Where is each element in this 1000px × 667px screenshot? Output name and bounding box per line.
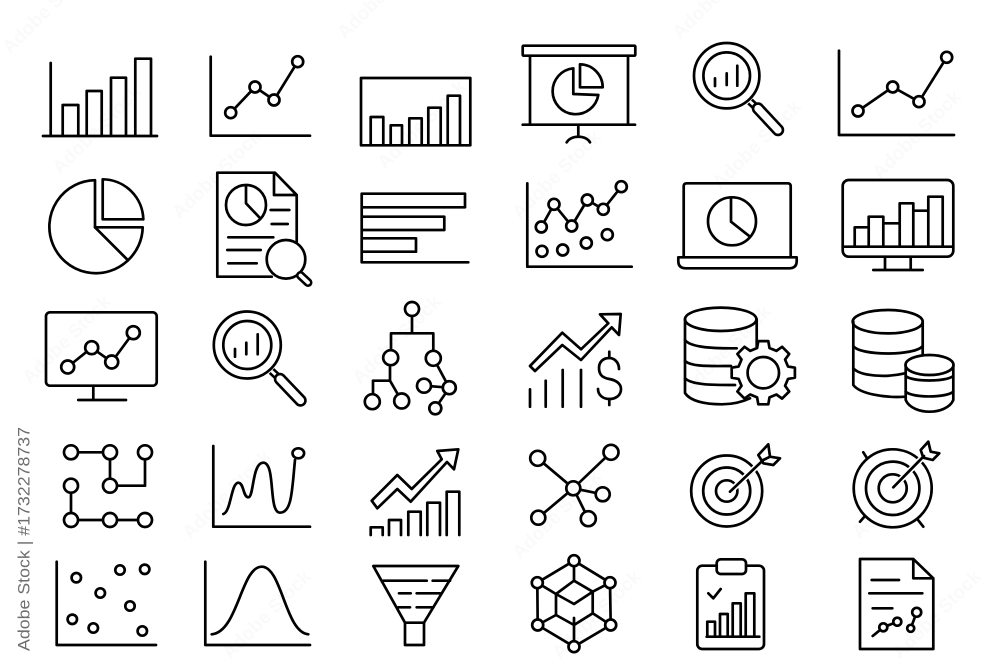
icon: document with pie chart and magnifier	[217, 173, 308, 282]
icon sheet: Adobe Stock	[709, 96, 806, 194]
icon sheet: Adobe Stock	[549, 566, 646, 664]
icon: line chart	[839, 51, 954, 135]
icon sheet: Adobe Stock	[509, 126, 606, 224]
icon sheet: Adobe Stock	[509, 466, 606, 564]
icon sheet: Adobe Stock	[179, 446, 276, 544]
icon: line and scatter chart	[527, 181, 632, 267]
icon: database stacks	[853, 310, 954, 412]
icon: scatter plot	[57, 562, 156, 645]
icon sheet: Adobe Stock	[374, 76, 471, 174]
icon sheet: Adobe Stock	[679, 301, 776, 399]
icon: presentation board with pie chart	[523, 46, 635, 142]
icon: funnel	[373, 566, 458, 645]
icon: bar chart	[43, 59, 157, 136]
icon: target with arrow and legs	[854, 442, 939, 527]
icon: wave line chart	[213, 446, 310, 527]
icon: line chart	[211, 56, 310, 136]
icon sheet: Adobe Stock	[169, 126, 266, 224]
icon sheet: Adobe Stock	[849, 446, 946, 544]
icon: laptop with pie chart	[678, 183, 797, 268]
icon: document with line chart	[860, 559, 933, 649]
icon: network hub	[530, 445, 618, 526]
icon: magnifier with bars	[214, 312, 300, 400]
icon: growth arrow with bars	[371, 449, 459, 535]
icon: connected circuit nodes	[64, 445, 152, 527]
icon sheet: Adobe Stock	[49, 81, 146, 179]
icon: clipboard with bar chart	[697, 559, 764, 649]
icon: monitor with line chart	[46, 312, 157, 400]
stock watermark id: Adobe Stock | #1732278737	[14, 427, 34, 651]
icon sheet: Adobe Stock	[889, 566, 986, 664]
icon sheet: Adobe Stock	[869, 86, 966, 184]
icon sheet: Adobe Stock	[219, 566, 316, 664]
icon: decision tree	[365, 302, 456, 414]
icon: hexagonal cube network	[532, 555, 616, 652]
icon sheet: Adobe Stock	[19, 291, 116, 389]
icon: magnifier with bars	[694, 43, 778, 130]
icon: target with arrow	[691, 444, 780, 526]
icon: growth arrow with dollar sign	[530, 314, 621, 407]
icon: horizontal bar chart	[362, 194, 468, 262]
icon: monitor with bar chart	[843, 180, 953, 270]
icon sheet: Adobe Stock	[349, 291, 446, 389]
icon: framed bar chart	[361, 78, 470, 145]
icon: bell curve	[205, 562, 310, 645]
icon: pie chart	[49, 179, 143, 273]
icon: database with gear	[685, 308, 795, 404]
